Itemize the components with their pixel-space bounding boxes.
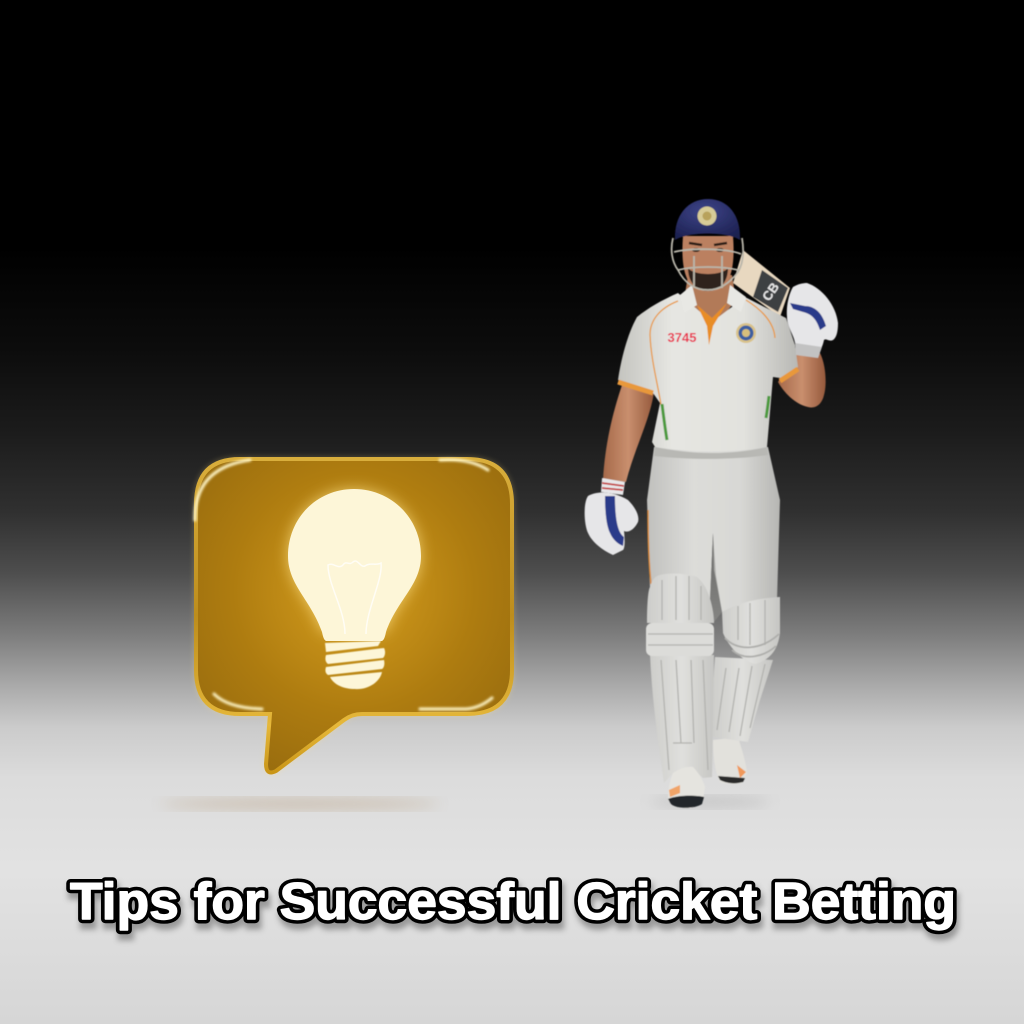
trouser stripe: [648, 510, 651, 584]
near knee pad: [647, 574, 714, 623]
player floor shadow: [650, 797, 770, 807]
title: [70, 873, 958, 937]
near shin pad: [650, 655, 714, 783]
trousers: [647, 447, 780, 622]
title text: Tips for Successful Cricket Betting: [70, 873, 956, 931]
open collar V: [692, 288, 730, 318]
knee roll: [646, 623, 714, 656]
red sponsor logo: 3745: [668, 330, 696, 345]
neck: [684, 275, 736, 335]
inner leg shadow: [710, 533, 722, 622]
bulb filament: [328, 561, 381, 634]
icon: light bulb: [288, 489, 421, 689]
shirt green side stripes: [662, 396, 769, 440]
bulb glow: [288, 489, 421, 632]
right pad and shoe (far leg): [712, 597, 780, 784]
shirt orange trim: [618, 300, 798, 405]
title outline: Tips for Successful Cricket Betting: [70, 873, 956, 931]
bat: CB: [759, 280, 782, 304]
far knee pad: [722, 597, 780, 664]
raised glove: [787, 283, 838, 358]
cricket player: [585, 199, 838, 808]
waistband: [654, 447, 768, 459]
helmet grill: [672, 238, 743, 290]
floor shadow under speech bubble: [160, 799, 440, 809]
team badge: [736, 323, 756, 343]
bubble body: [196, 459, 512, 772]
eyes and brows: [689, 243, 727, 252]
shirt: [618, 285, 798, 452]
bat: [733, 250, 790, 317]
helmet dome: [675, 199, 740, 240]
title shadow: Tips for Successful Cricket Betting: [72, 879, 958, 937]
near shoe: [668, 767, 705, 808]
helmet crest: [698, 206, 716, 226]
beard: [688, 268, 728, 291]
bulb screw base: [325, 641, 385, 689]
left pad and shoe (near leg): [646, 574, 714, 808]
far shin pad: [712, 657, 773, 742]
far arm: [778, 347, 826, 407]
collar flaps: [680, 285, 697, 313]
face: [682, 236, 734, 292]
head: [672, 199, 743, 292]
bubble highlight corners: [195, 460, 492, 709]
orange placket: [697, 303, 727, 345]
bubble glow: [196, 459, 512, 772]
far shoe: [713, 737, 747, 784]
lowered glove: [585, 478, 638, 555]
near arm: [603, 385, 654, 482]
bulb glass: [288, 489, 421, 641]
speech bubble with light bulb: [195, 459, 512, 772]
